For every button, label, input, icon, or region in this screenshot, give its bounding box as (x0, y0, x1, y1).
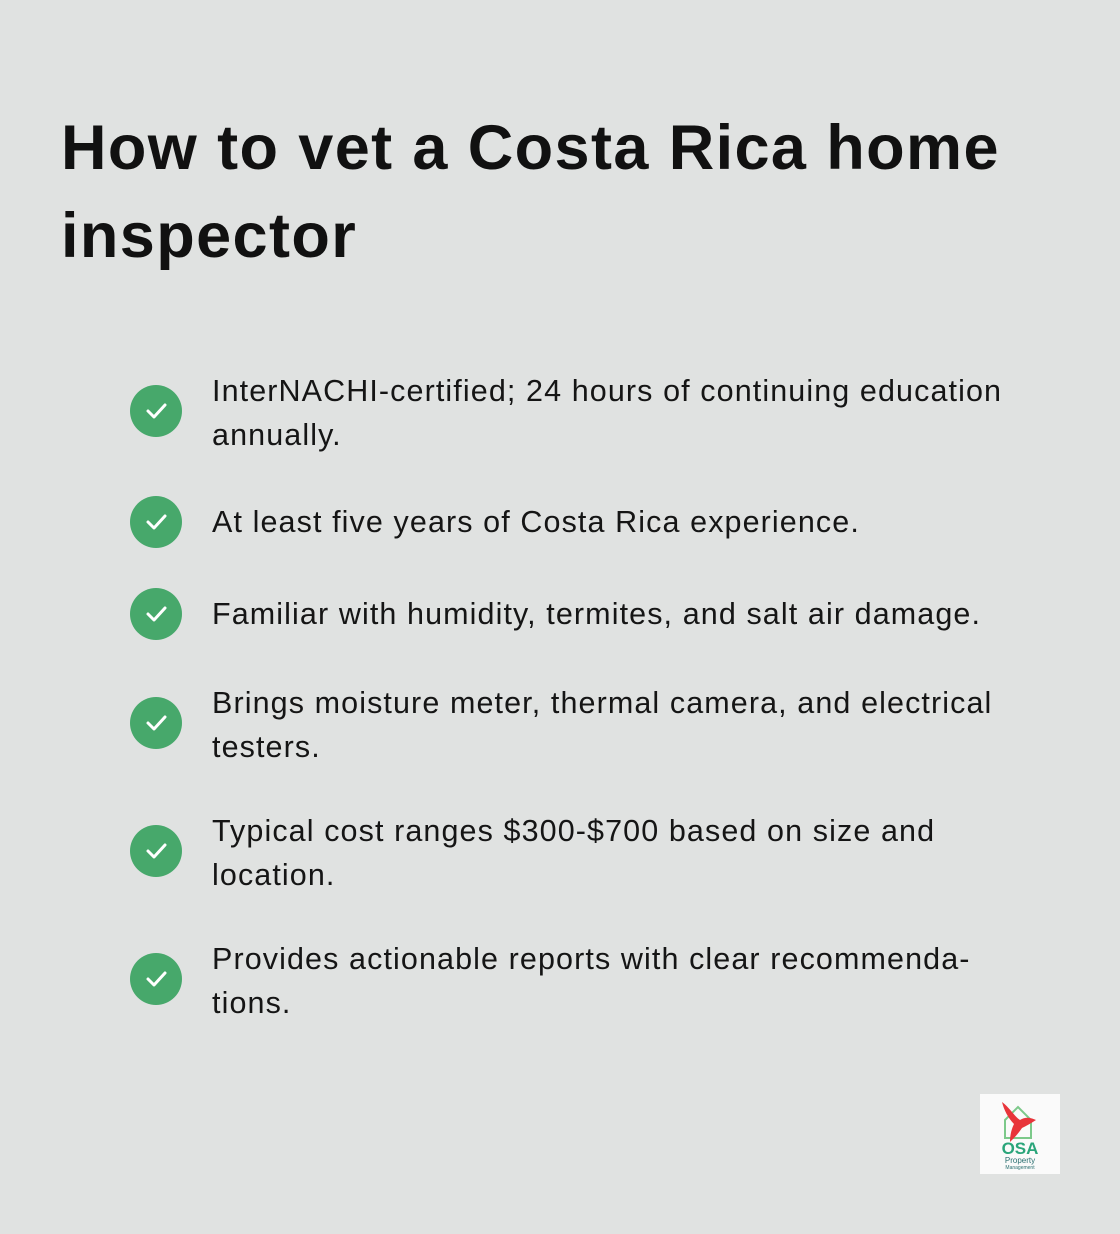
text: location. (212, 858, 336, 892)
item 3 (130, 588, 981, 640)
text: tions. (212, 986, 292, 1020)
text: InterNACHI-certified; 24 hours of continuing education (212, 374, 1002, 408)
logo: OSA (1002, 1139, 1038, 1158)
text: testers. (212, 730, 321, 764)
logo: Management (1005, 1165, 1035, 1171)
title: How to vet a Costa Rica home (61, 113, 1000, 183)
icon: check (130, 385, 182, 437)
text (212, 942, 971, 1020)
text: annually. (212, 418, 342, 452)
text: At least five years of Costa Rica experience. (212, 505, 860, 539)
logo (980, 1094, 1060, 1174)
text: Provides actionable reports with clear recommenda- (212, 942, 971, 976)
icon: check (130, 825, 182, 877)
icon: check (130, 697, 182, 749)
title: inspector (61, 201, 357, 271)
item 4 (130, 686, 992, 764)
item 5 (130, 814, 935, 892)
text (212, 374, 1002, 452)
icon: check (130, 588, 182, 640)
item 1 (130, 374, 1002, 452)
icon: check (130, 953, 182, 1005)
logo: Property (1005, 1156, 1035, 1165)
text: Familiar with humidity, termites, and salt air damage. (212, 597, 981, 631)
title (61, 113, 1000, 271)
text: Typical cost ranges $300-$700 based on size and (212, 814, 935, 848)
text: Brings moisture meter, thermal camera, and electrical (212, 686, 992, 720)
text (212, 686, 992, 764)
icon: check (130, 496, 182, 548)
text (212, 814, 935, 892)
item 2 (130, 496, 860, 548)
item 6 (130, 942, 971, 1020)
